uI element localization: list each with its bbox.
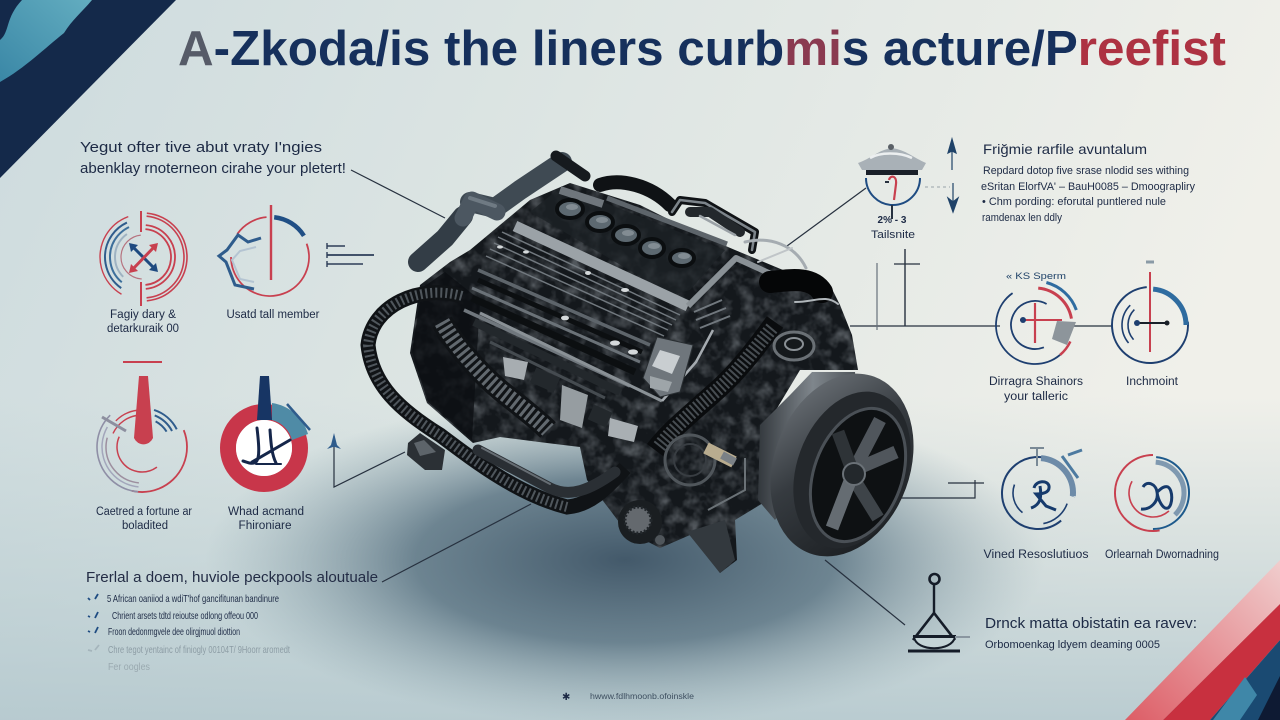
icon: donut chart xyxy=(228,376,310,484)
engine main block xyxy=(410,183,858,573)
checklist heading: Frerlal a doem, huviole peckpools aloutuale xyxy=(86,569,378,586)
top pipes xyxy=(600,182,755,250)
spec highlights xyxy=(497,245,638,355)
right top text block xyxy=(981,141,1195,224)
checklist items: Fer oogles xyxy=(108,661,150,673)
checklist items: Chrient arsets tdtd reioutse odlong offeou 000 xyxy=(112,610,258,622)
corner decoration: bottom right xyxy=(1125,560,1280,720)
checklist items xyxy=(107,593,290,673)
icon: up and down arrows xyxy=(948,139,958,212)
left serpentine belt xyxy=(368,293,625,507)
icon: target diagram left xyxy=(980,270,1090,380)
icon: resolution ring xyxy=(987,442,1089,544)
label: target right: Inchmoint xyxy=(1126,376,1179,388)
valve cover strip xyxy=(515,226,795,306)
intro text xyxy=(80,140,346,177)
label: icon 4: Whad acmand xyxy=(228,506,304,518)
long bars xyxy=(464,270,713,401)
block body: • Chm pording: eforutal puntlered nule xyxy=(982,196,1166,208)
tube end cap xyxy=(407,433,445,470)
callout lines xyxy=(334,170,1112,625)
intro text: Yegut ofter tive abut vraty I'ngies xyxy=(80,140,322,156)
drum housing xyxy=(758,372,858,520)
cylinder row xyxy=(530,186,727,295)
top hose xyxy=(418,156,585,262)
block heading: Friğmie rarfile avuntalum xyxy=(983,141,1147,157)
hub xyxy=(843,463,865,485)
engine illustration xyxy=(368,156,938,580)
label: ring with blue arcs: Orlearnah Dwornadning xyxy=(1105,549,1219,561)
label: dome component: Tailsnite xyxy=(871,229,915,241)
bottom right text xyxy=(985,615,1197,651)
icon: small arrowhead xyxy=(327,433,341,449)
checkmarks xyxy=(88,594,99,651)
corner decoration: top left xyxy=(0,0,176,178)
spokes xyxy=(832,420,896,528)
checklist items: Chre tegot yentainc of finiogly 00104T/ 9Hoorr aromedt xyxy=(108,644,290,656)
icon: target diagram left: « KS Sperm xyxy=(1006,271,1066,282)
footer xyxy=(562,691,694,703)
label: target left: your talleric xyxy=(1004,391,1068,403)
checklist items: 5 African oaniiod a wdiT'hof gancifitunan bandinure xyxy=(107,593,279,605)
engine side belt xyxy=(655,322,775,450)
lower gear xyxy=(618,500,735,573)
label: icon 1: detarkuraik 00 xyxy=(107,323,179,335)
footer: ✱ xyxy=(562,692,570,703)
heading: Drnck matta obistatin ea ravev: xyxy=(985,615,1197,632)
block body xyxy=(981,165,1195,224)
caption: Orbomoenkag ldyem deaming 0005 xyxy=(985,639,1160,651)
label: icon 2: Usatd tall member xyxy=(226,309,320,321)
wheel xyxy=(746,353,938,577)
label: dome component xyxy=(871,215,915,241)
upper right hoses xyxy=(745,240,838,304)
icon: gauge rings with crossed arrows xyxy=(84,198,202,316)
label: icon 3 xyxy=(96,506,192,532)
checklist items: Froon dedonrngvele dee olirgjmuol diottion xyxy=(108,626,240,638)
icon: lamp on stand xyxy=(908,574,970,651)
label: icon 4 xyxy=(228,506,304,532)
chrome fittings xyxy=(503,337,693,442)
pulley and fitting xyxy=(665,332,814,510)
bottom left checklist xyxy=(86,569,378,673)
label: icon 3: Caetred a fortune ar xyxy=(96,506,192,518)
label: icon 4: Fhironiare xyxy=(238,520,292,532)
label: resolution ring: Vined Resoslutiuos xyxy=(984,549,1089,561)
dark left mass xyxy=(412,272,480,440)
cover ribs xyxy=(486,232,730,336)
label: icon 1 xyxy=(107,309,179,335)
icon: red wedge radial gauge xyxy=(83,362,201,506)
intro text: abenklay rnoterneon cirahe your pletert! xyxy=(80,161,346,177)
title: A-Zkoda/is the liners curbmis acture/Preefist xyxy=(178,22,1226,76)
block body: eSritan ElorfVA' – BauH0085 – Dmoograpliry xyxy=(981,181,1195,193)
label: icon 3: boladited xyxy=(122,520,168,532)
label: target left xyxy=(989,376,1083,403)
mini legend bars xyxy=(327,243,374,267)
tyre xyxy=(746,353,938,577)
label: dome component: 2% - 3 xyxy=(878,215,907,226)
icon: ring with blue arcs xyxy=(1109,449,1197,537)
footer: hwww.fdlhmoonb.ofoinskle xyxy=(590,691,694,701)
icon: dome component xyxy=(858,144,950,219)
label: target left: Dirragra Shainors xyxy=(989,376,1083,388)
label: icon 1: Fagiy dary & xyxy=(110,309,176,321)
rim xyxy=(793,395,923,555)
icon: circle with needle xyxy=(214,201,326,313)
block body: ramdenax len ddly xyxy=(982,212,1062,224)
icon: target diagram right xyxy=(1109,262,1191,366)
metallic texture xyxy=(412,183,858,570)
block body: Repdard dotop five srase nlodid ses withing xyxy=(983,165,1189,177)
exhaust tube xyxy=(478,448,615,492)
